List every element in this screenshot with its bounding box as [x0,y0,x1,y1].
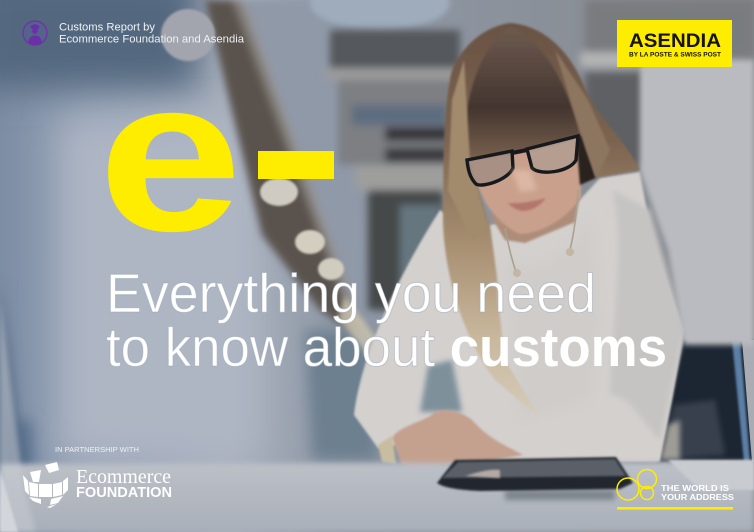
light foreground column [640,60,754,345]
logo: The world is your address: THE WORLD IS [661,483,729,493]
headline: Everything you need [106,262,596,324]
neck [490,195,580,243]
sweater [354,172,684,462]
shelves [325,30,460,310]
big yellow e- mark [98,33,334,276]
face [467,135,581,234]
logo: Ecommerce Foundation: Ecommerce [76,467,171,488]
necklace [505,190,578,275]
report credit: Ecommerce Foundation and Asendia [59,34,245,46]
credit text: Customs Report by [59,22,155,34]
hand [392,410,523,475]
photo: woman [354,23,754,475]
partnership label: IN PARTNERSHIP WITH [55,445,139,454]
headline [106,262,667,378]
report credit [23,21,245,46]
keyboard on the right [658,340,754,462]
fringe [464,27,580,161]
headline: to know about customs [106,316,667,378]
top right wall [580,0,754,167]
logo: Asendia: BY LA POSTE & SWISS POST [629,52,721,58]
logo: Ecommerce Foundation [23,462,172,508]
glasses [467,136,578,185]
logo: Ecommerce Foundation: FOUNDATION [76,485,172,501]
tablet [437,457,633,491]
lips [508,198,546,211]
top light disc [310,0,450,30]
logo: The world is your address [617,470,734,510]
big yellow e- mark: e [98,33,242,276]
icon: globe [23,462,68,508]
gap between arm and body [420,360,462,412]
diagonal ceiling beam [205,0,378,340]
hair [443,23,640,418]
logo: Asendia: ASENDIA [629,31,721,52]
logo: The world is your address: YOUR ADDRESS [661,492,734,502]
ceiling lamps [161,9,215,61]
logo: Asendia [617,20,732,67]
icon: customs officer badge [23,21,47,45]
dash [258,151,334,179]
photo: table and tablet [0,300,754,532]
